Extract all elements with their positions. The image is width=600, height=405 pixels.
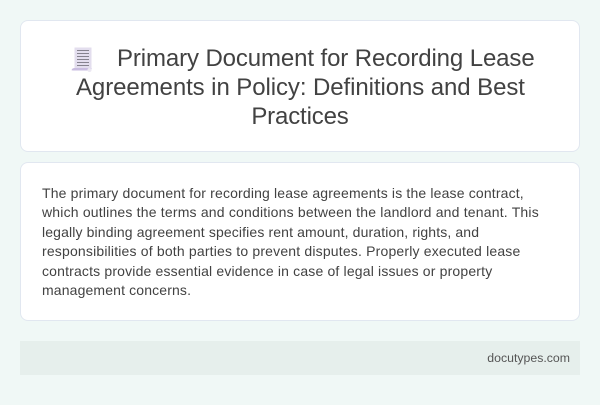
body text: contracts provide essential evidence in case of legal issues or property — [42, 263, 492, 279]
body text: management concerns. — [42, 282, 191, 298]
title: Practices — [251, 103, 349, 130]
body text: responsibilities of both parties to prevent disputes. Properly executed lease — [42, 243, 520, 259]
footer bar — [20, 341, 580, 375]
title — [76, 45, 535, 130]
panel: title card — [20, 20, 580, 152]
footer source text: docutypes.com — [487, 351, 570, 365]
body text: The primary document for recording lease agreements is the lease contract, — [42, 185, 524, 201]
title: Primary Document for Recording Lease — [117, 45, 535, 72]
body text — [42, 185, 539, 298]
body text: which outlines the terms and conditions between the landlord and tenant. This — [42, 204, 539, 220]
title: Agreements in Policy: Definitions and Best — [76, 74, 525, 101]
icon: document scroll — [72, 48, 92, 72]
body text: legally binding agreement specifies rent amount, duration, rights, and — [42, 224, 479, 240]
panel: description card — [20, 162, 580, 321]
